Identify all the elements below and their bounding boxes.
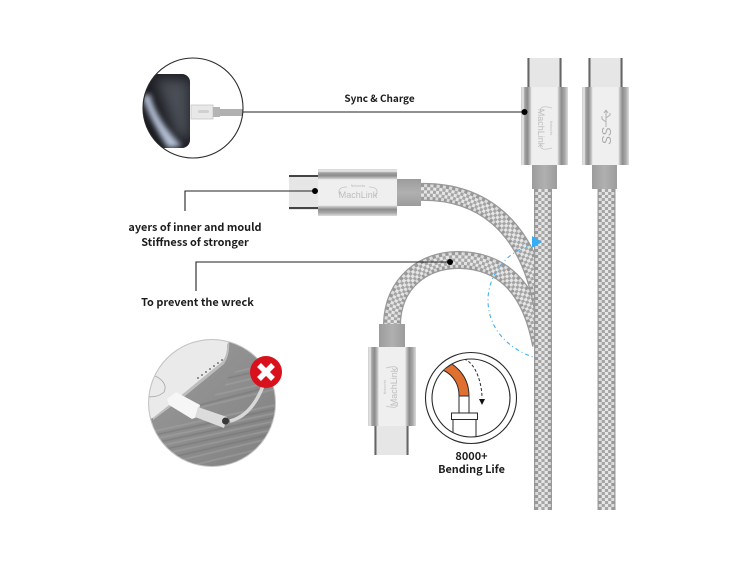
lower curved braided cable bbox=[392, 260, 541, 345]
arrow: blue dashed bend direction bbox=[488, 236, 542, 358]
icon: phone charging circle bbox=[142, 58, 244, 158]
connector: right cable two with SS logo: SS bbox=[599, 127, 614, 145]
leader line: layers of inner and mould bbox=[185, 188, 318, 211]
connector: right cable two with SS logo bbox=[582, 58, 629, 189]
right cable two: straight braid bbox=[606, 186, 608, 510]
right cable one: straight braid bbox=[542, 186, 544, 510]
leader line: sync and charge bbox=[243, 109, 528, 115]
connector: lower cable with MachLink logo bbox=[368, 324, 416, 455]
middle curved braided cable bbox=[418, 192, 543, 310]
label: layers and stiffness: ayers of inner and mould bbox=[128, 219, 262, 235]
connector: right cable one with MachLink logo bbox=[521, 58, 568, 189]
leader line: prevent the wreck bbox=[196, 259, 453, 291]
connector: middle cable with MachLink logo: MachLink bbox=[339, 190, 378, 200]
icon: bending life circle bbox=[426, 352, 516, 444]
label: layers and stiffness: Stiffness of stronger bbox=[141, 234, 249, 250]
icon: red cross badge bbox=[250, 356, 282, 388]
connector: middle cable with MachLink logo bbox=[289, 169, 421, 216]
connector: lower cable with MachLink logo: Networks bbox=[383, 379, 387, 394]
connector: right cable one with MachLink logo: MachLink bbox=[536, 109, 546, 148]
label: 8000+ bending life bbox=[438, 448, 505, 477]
connector: right cable one with MachLink logo: Networks bbox=[549, 121, 553, 136]
label: prevent the wreck: To prevent the wreck bbox=[141, 294, 254, 310]
connector: middle cable with MachLink logo: Networks bbox=[351, 184, 366, 188]
photo: frayed broken cable on wood bbox=[145, 336, 280, 470]
label: layers and stiffness bbox=[128, 219, 262, 250]
label: 8000+ bending life: 8000+ bbox=[455, 448, 488, 464]
label: sync and charge: Sync & Charge bbox=[344, 90, 415, 105]
label: 8000+ bending life: Bending Life bbox=[438, 461, 505, 477]
connector: lower cable with MachLink logo: MachLink bbox=[389, 367, 399, 406]
